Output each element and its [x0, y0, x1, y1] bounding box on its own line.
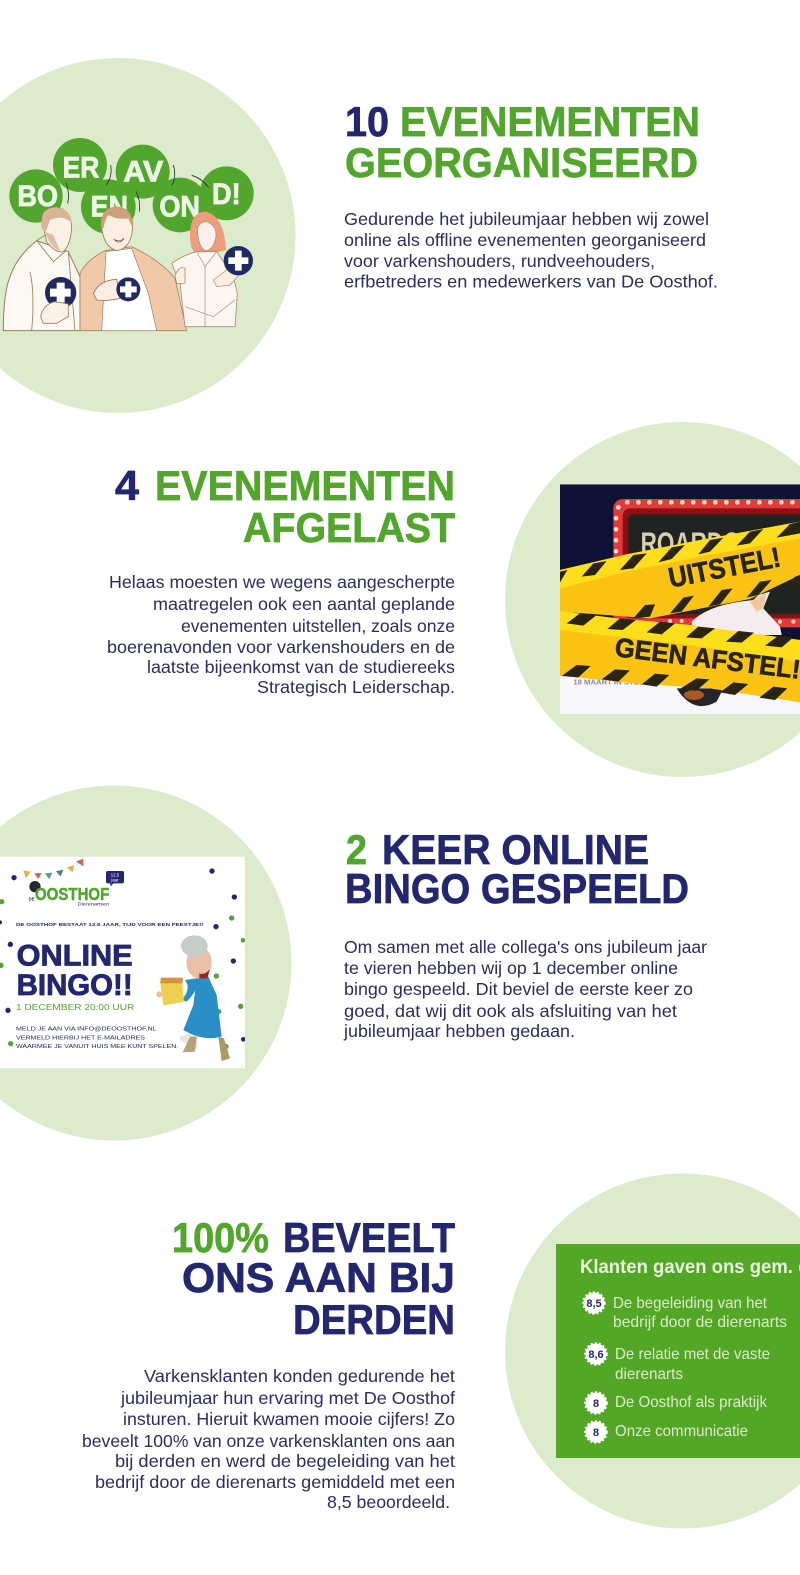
- body text 1: Gedurende het jubileumjaar hebben wij zowel: [344, 209, 709, 229]
- score labels: [613, 1295, 787, 1440]
- bunting: [23, 859, 83, 879]
- body text 3: te vieren hebben wij op 1 december online: [344, 958, 678, 978]
- letter bubbles: AV: [123, 156, 164, 189]
- score labels: De begeleiding van het: [613, 1295, 768, 1312]
- heading 3: 2: [346, 826, 367, 873]
- grey caption: 18 MAART IN STEEG: [573, 679, 650, 686]
- body text 4: insturen. Hieruit kwamen mooie cijfers! Zo: [123, 1409, 455, 1429]
- score badges: 8,6: [588, 1349, 604, 1361]
- body text 2: evenementen uitstellen, zoals onze: [181, 616, 455, 636]
- letter bubbles: BO: [17, 180, 58, 213]
- body text 2: Helaas moesten we wegens aangescherpte: [109, 572, 455, 592]
- heading 3: [345, 826, 689, 912]
- score badges: 8,5: [586, 1298, 602, 1310]
- image: online bingo poster: [0, 857, 246, 1068]
- heading 4: DERDEN: [293, 1296, 455, 1343]
- body text 2: boerenavonden voor varkenshouders en de: [107, 637, 455, 657]
- heading 1: EVENEMENTEN: [400, 98, 700, 145]
- circle 2: [505, 422, 800, 777]
- score labels: Onze communicatie: [615, 1423, 748, 1440]
- heading 4: [172, 1214, 455, 1343]
- poster text: [16, 922, 204, 1050]
- body text 1: [344, 209, 718, 292]
- body text 1: erfbetreders en medewerkers van De Oosthof.: [344, 272, 718, 292]
- score badges: 8: [593, 1427, 599, 1439]
- letter bubbles: ER: [63, 151, 99, 184]
- heading 4: 100%: [172, 1214, 269, 1261]
- circle 4: [505, 1174, 800, 1528]
- body text 3: [343, 937, 707, 1041]
- body text 4: Varkensklanten konden gedurende het: [144, 1366, 455, 1386]
- marquee sign: ROARDO: [641, 526, 741, 560]
- circle 1: [0, 58, 296, 413]
- heading 1: 10: [345, 98, 389, 145]
- body text 4: jubileumjaar hun ervaring met De Oosthof: [120, 1388, 455, 1408]
- body text 4: 8,5 beoordeeld.: [327, 1492, 450, 1512]
- marquee sign: [613, 499, 800, 627]
- body text 2: [107, 572, 455, 697]
- body text 2: laatste bijeenkomst van de studiereeks: [147, 657, 455, 677]
- body text 4: bij derden en werd de begeleiding van het: [115, 1451, 455, 1471]
- section 4: beveelt ons aan: [82, 1174, 800, 1528]
- body text 3: goed, dat wij dit ook als afsluiting van het: [344, 1001, 677, 1021]
- body text 4: beveelt 100% van onze varkensklanten ons aan: [82, 1431, 455, 1451]
- heading 2: 4: [115, 462, 140, 509]
- logo: DE: [29, 896, 35, 901]
- letter bubbles: EN: [91, 191, 128, 224]
- circle 3: [0, 786, 292, 1140]
- poster text: MELD JE AAN VIA INFO@DEOOSTHOF.NL: [16, 1027, 157, 1033]
- logo: 12,5: [111, 872, 120, 877]
- heading 1: GEORGANISEERD: [345, 139, 698, 186]
- panel: klantbeoordeling: [556, 1244, 800, 1458]
- score labels: dierenarts: [615, 1366, 683, 1383]
- poster text: 1 DECEMBER 20:00 UUR: [16, 1002, 134, 1012]
- heading 4: BEVEELT: [283, 1214, 455, 1261]
- letter bubbles: [9, 138, 254, 234]
- heading 3: KEER ONLINE: [382, 826, 649, 873]
- body text 4: [82, 1366, 455, 1512]
- tape: uitstel: [560, 522, 800, 618]
- score labels: De Oosthof als praktijk: [615, 1394, 768, 1411]
- wheels: [677, 688, 723, 706]
- tape: uitstel: UITSTEL!: [666, 542, 783, 594]
- logo: [29, 871, 124, 907]
- grandma figure: [156, 935, 230, 1061]
- heading 2: EVENEMENTEN: [155, 462, 455, 509]
- body text 3: bingo gespeeld. Dit beviel de eerste keer zo: [344, 979, 693, 999]
- tape: geen afstel: [560, 611, 800, 702]
- curved arrows: [66, 165, 209, 212]
- piggy: [692, 592, 782, 635]
- heading 1: [345, 98, 700, 186]
- heading 2: [115, 462, 455, 551]
- logo: jaar: [110, 877, 119, 882]
- poster text: DE OOSTHOF BESTAAT 12.5 JAAR, TIJD VOOR EEN FEESTJE!!: [16, 922, 204, 927]
- body text 1: online als offline evenementen georganiseerd: [344, 230, 706, 250]
- person left: [3, 207, 80, 331]
- letter bubbles: ON: [159, 191, 200, 224]
- letter bubbles: D!: [212, 178, 241, 211]
- heading 4: ONS AAN BIJ: [182, 1254, 455, 1301]
- illustration: boerenavond team: [3, 138, 254, 331]
- score badges: 8: [593, 1398, 599, 1410]
- section 2: evenementen afgelast: [107, 422, 800, 777]
- section 3: online bingo: [0, 786, 707, 1140]
- logo: Dierenartsen: [78, 902, 110, 907]
- body text 1: voor varkenshouders, rundveehouders,: [344, 251, 655, 271]
- image: uitstel tape: [560, 484, 800, 715]
- poster text: WAARMEE JE VANUIT HUIS MEE KUNT SPELEN.: [16, 1044, 178, 1050]
- body text 3: jubileumjaar hebben gedaan.: [343, 1021, 575, 1041]
- person middle: [80, 207, 187, 331]
- score labels: bedrijf door de dierenarts: [613, 1314, 787, 1331]
- score badges: [584, 1292, 606, 1442]
- score labels: De relatie met de vaste: [615, 1346, 770, 1363]
- heading 3: BINGO GESPEELD: [345, 865, 689, 912]
- poster text: BINGO!!: [17, 969, 133, 1002]
- body text 4: bedrijf door de dierenarts gemiddeld met een: [95, 1472, 455, 1492]
- section 1: evenementen georganiseerd: [0, 58, 718, 413]
- poster text: ONLINE: [17, 940, 133, 973]
- body text 3: Om samen met alle collega's ons jubileum jaar: [344, 937, 707, 957]
- logo: OOSTHOF: [35, 884, 109, 904]
- body text 2: maatregelen ook een aantal geplande: [153, 594, 455, 614]
- body text 2: Strategisch Leiderschap.: [257, 677, 455, 697]
- confetti: [0, 868, 246, 1042]
- heading 2: AFGELAST: [243, 504, 455, 551]
- person right: [172, 212, 253, 327]
- poster text: VERMELD HIERBIJ HET E-MAILADRES: [16, 1035, 146, 1041]
